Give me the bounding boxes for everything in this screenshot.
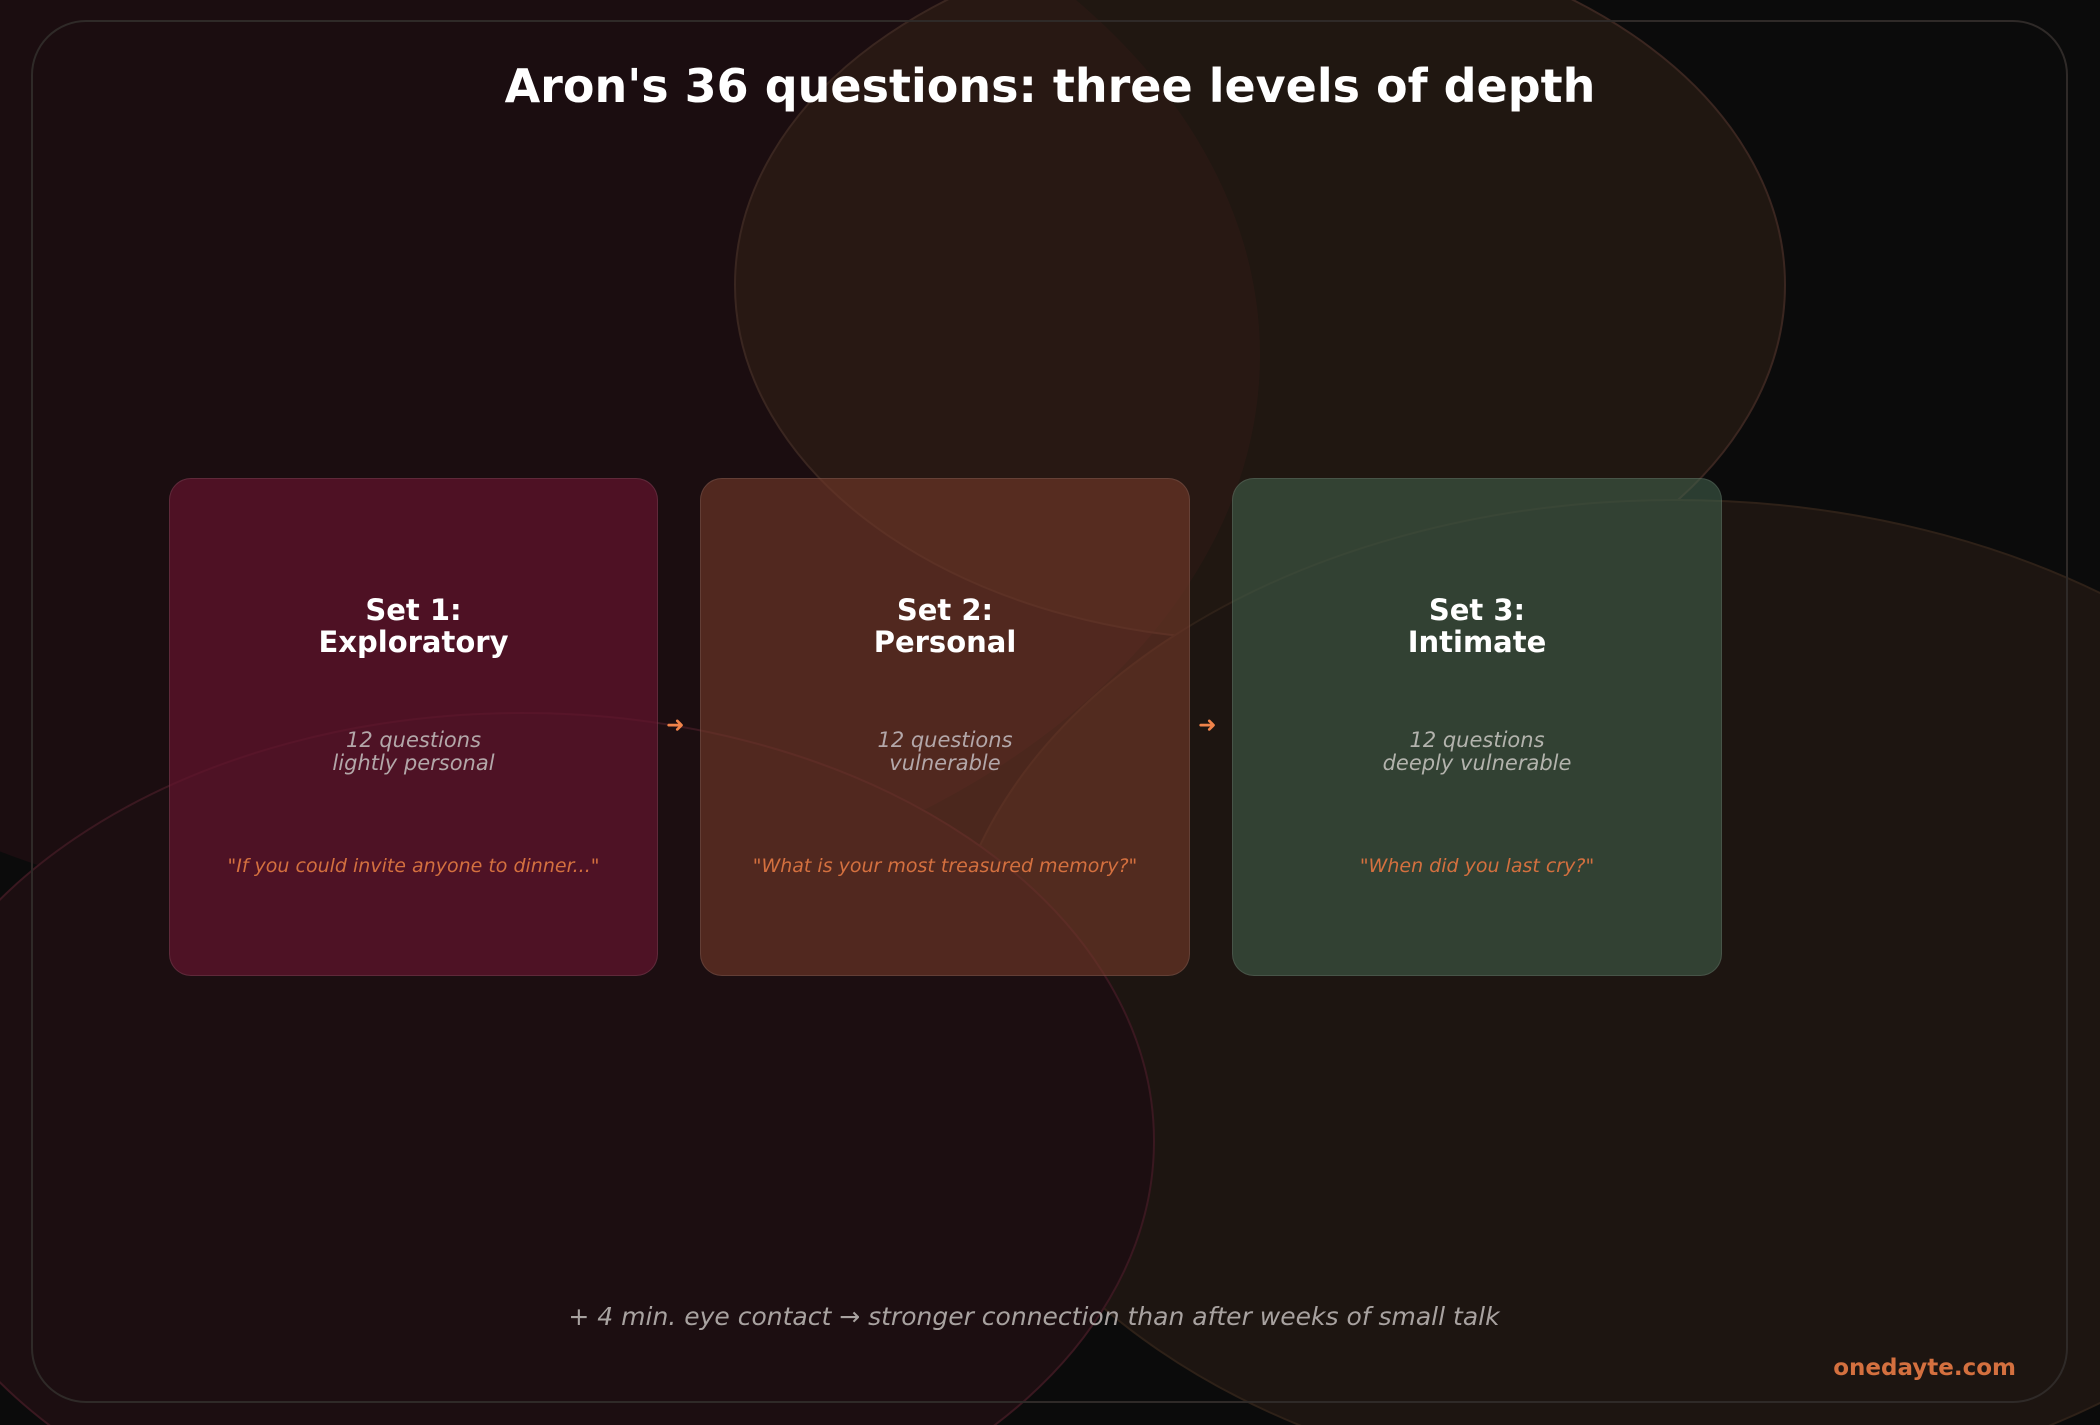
heading: set 1: Exploratory xyxy=(318,625,508,659)
panel: set 1 xyxy=(169,478,658,976)
title: Aron's 36 questions: three levels of depth xyxy=(505,59,1595,113)
text: set 1 description: lightly personal xyxy=(332,751,495,775)
arrow 1: ➜ xyxy=(666,713,684,738)
heading: set 2 xyxy=(874,593,1016,659)
heading: set 2: Personal xyxy=(874,625,1016,659)
heading: set 3 xyxy=(1408,593,1546,659)
panel: set 2 xyxy=(700,478,1190,976)
text: set 3 description xyxy=(1383,728,1571,775)
heading: set 1 xyxy=(318,593,508,659)
panel: set 3 xyxy=(1232,478,1722,976)
text: set 1 description: 12 questions xyxy=(346,728,481,752)
heading: set 3: Intimate xyxy=(1408,625,1546,659)
quote: set 2: "What is your most treasured memory?" xyxy=(753,855,1137,877)
quote: set 1: "If you could invite anyone to dinner..." xyxy=(227,855,600,877)
text: set 2 description: 12 questions xyxy=(877,728,1013,752)
text: set 1 description xyxy=(332,728,495,775)
quote: set 3: "When did you last cry?" xyxy=(1360,855,1594,877)
text: set 2 description: vulnerable xyxy=(889,751,1001,775)
heading: set 2: Set 2: xyxy=(897,593,993,627)
footer text: + 4 min. eye contact → stronger connection than after weeks of small talk xyxy=(568,1302,1500,1331)
brand: onedayte.com xyxy=(1833,1355,2016,1381)
heading: set 3: Set 3: xyxy=(1429,593,1525,627)
arrow 2: ➜ xyxy=(1198,713,1216,738)
heading: set 1: Set 1: xyxy=(365,593,462,627)
text: set 2 description xyxy=(877,728,1013,775)
text: set 3 description: deeply vulnerable xyxy=(1383,751,1571,775)
text: set 3 description: 12 questions xyxy=(1409,728,1545,752)
